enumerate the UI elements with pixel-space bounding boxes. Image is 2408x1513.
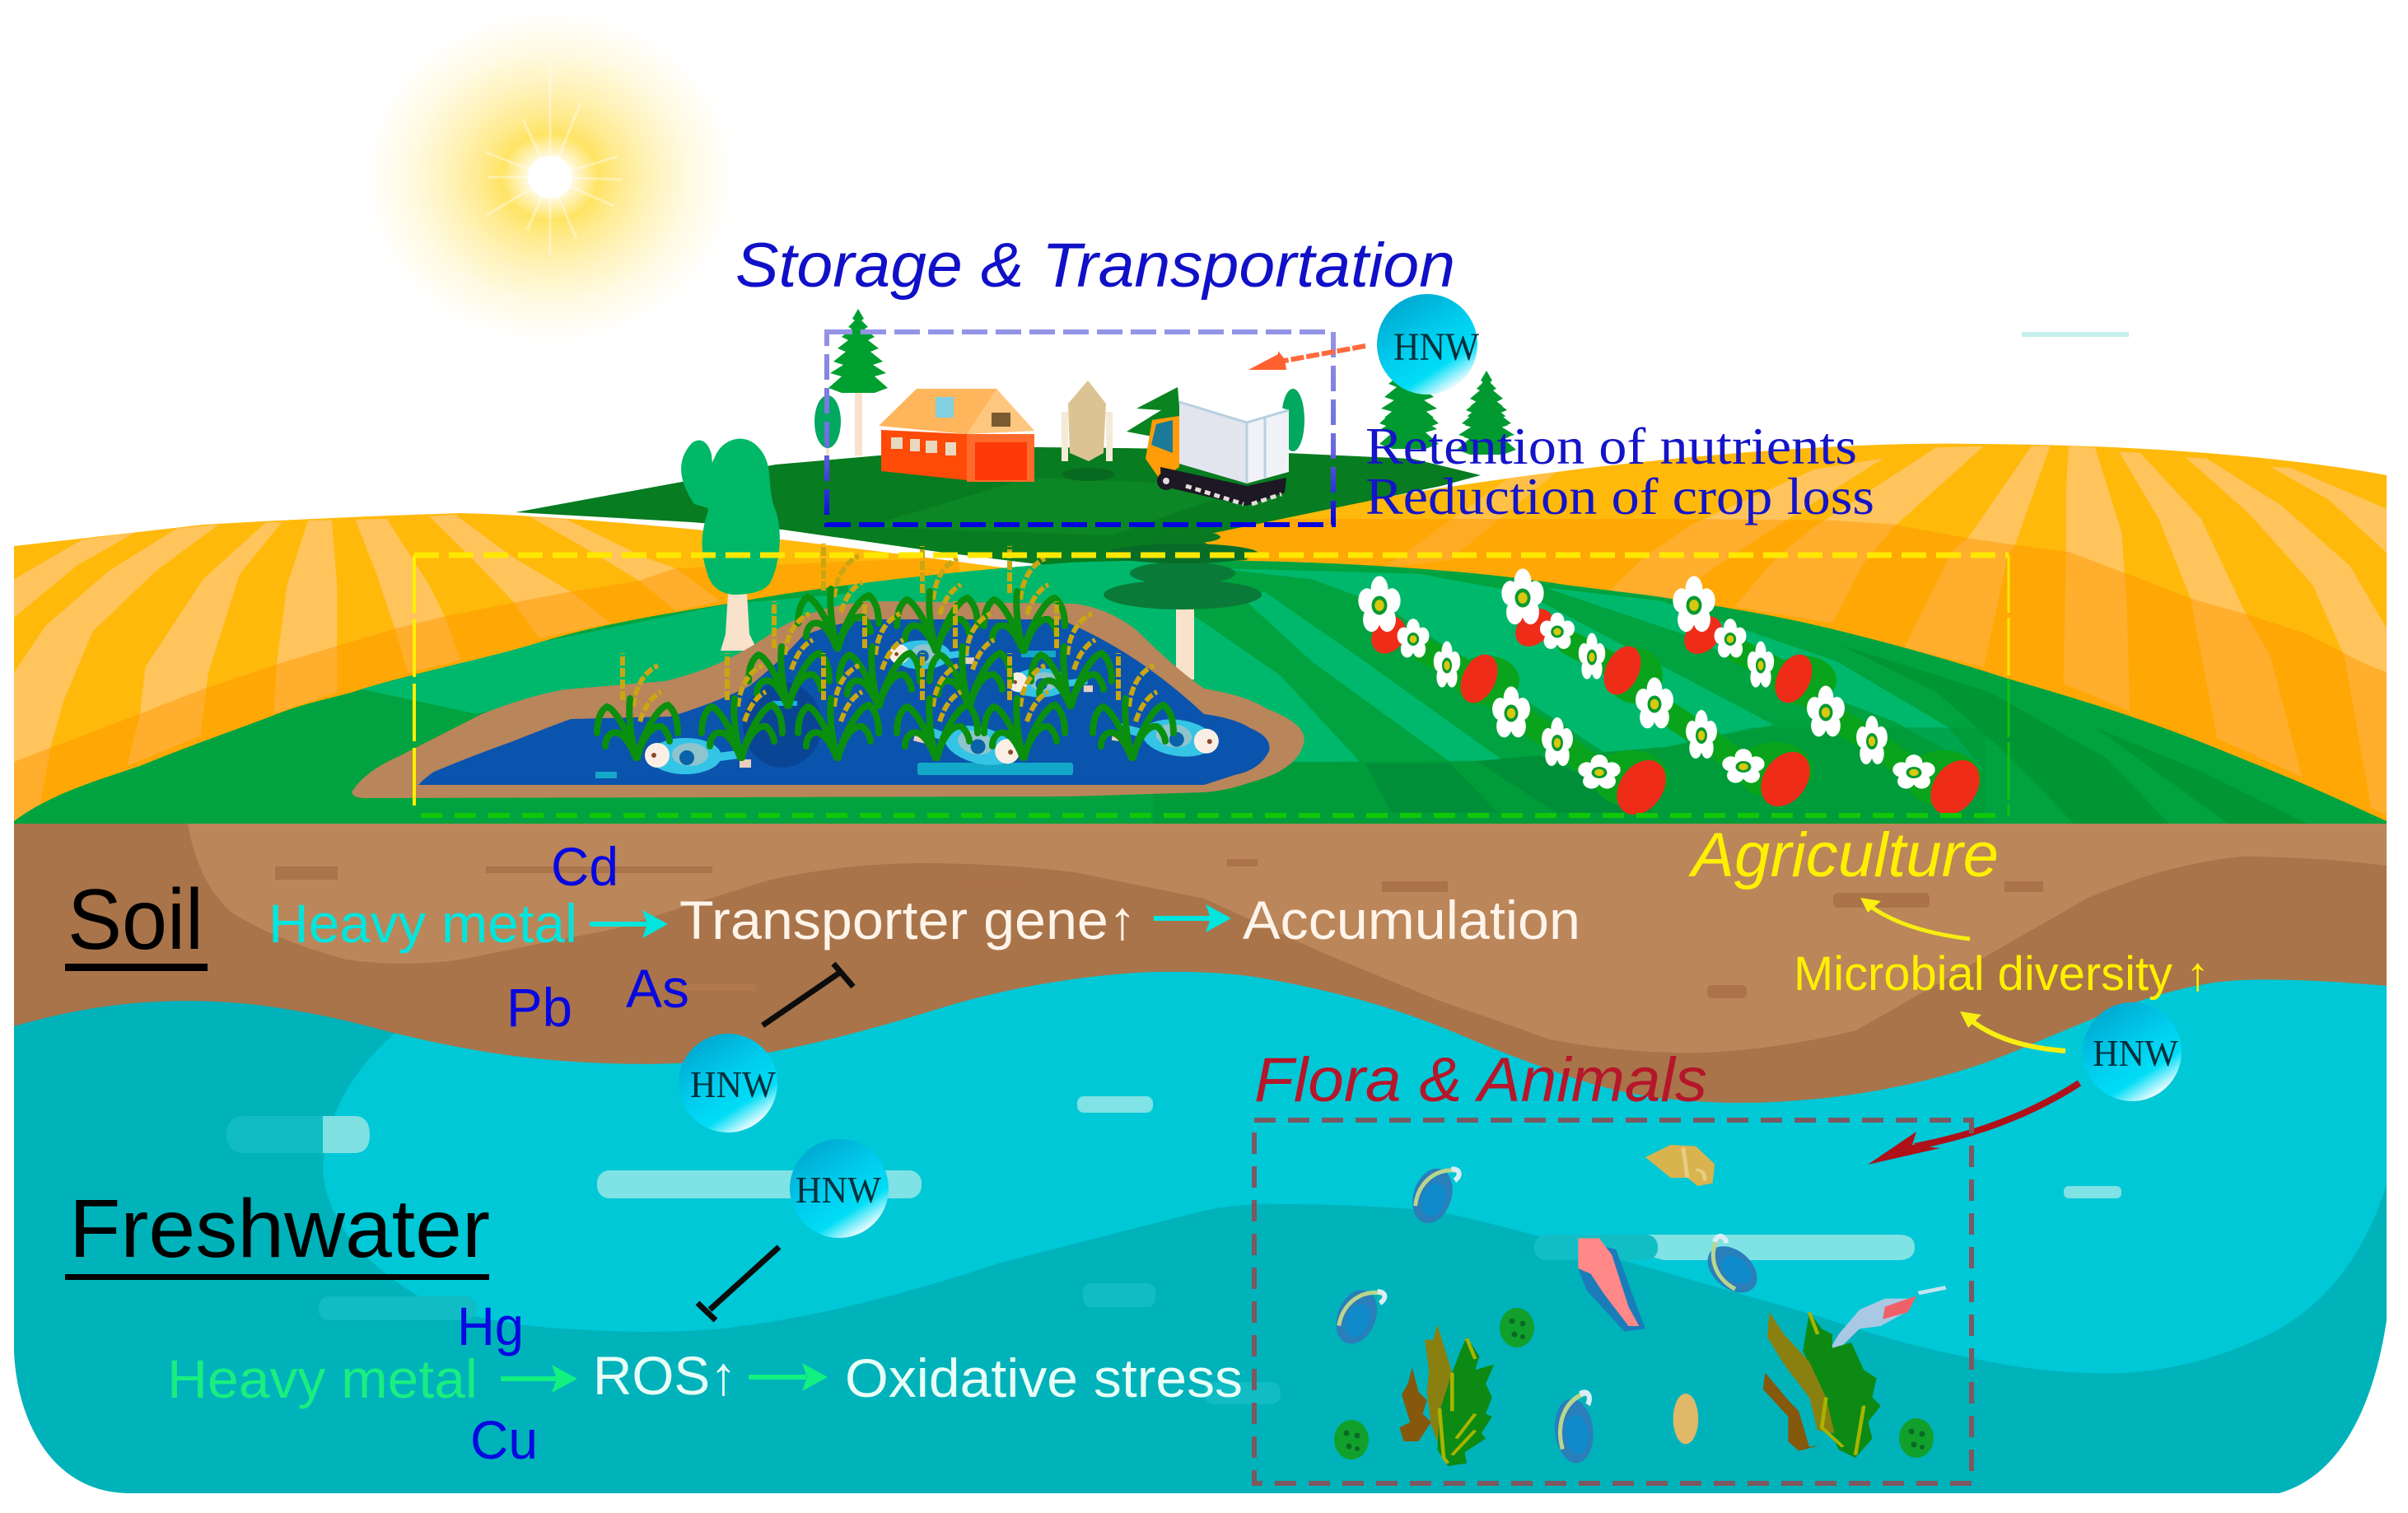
label: Freshwater: Freshwater [69, 1183, 490, 1275]
text: oxidative stress: Oxidative stress [845, 1347, 1243, 1408]
metals around soil pathway: As [626, 958, 689, 1019]
seaweed clump left [1399, 1324, 1494, 1466]
house [879, 389, 1034, 434]
HNW sphere: flora and animals: HNW [2093, 1032, 2179, 1074]
soil layer [14, 824, 2387, 1112]
back green hill [516, 447, 1481, 568]
paramecium cells [1406, 1160, 1460, 1228]
inhibition symbol: freshwater [698, 1247, 779, 1320]
storage farm scene [814, 309, 1304, 506]
water body [14, 964, 2387, 1493]
tree behind truck [1127, 387, 1184, 461]
foreground green hill with crop stripes [14, 552, 2394, 832]
shell [1645, 1145, 1715, 1186]
pond [352, 601, 1304, 798]
HNW sphere: soil: HNW [690, 1063, 777, 1105]
metals around freshwater pathway: Cu [470, 1409, 538, 1470]
metals around soil pathway [506, 836, 689, 1038]
text: heavy metal soil: Heavy metal [268, 893, 577, 954]
arrow [1154, 904, 1231, 932]
arrow: HNW to storage [1248, 346, 1365, 370]
label: agriculture: Agriculture [1688, 820, 1999, 890]
fish in pond [645, 640, 1221, 774]
water highlight bars [226, 1096, 2121, 1404]
green algae [1500, 1308, 1534, 1347]
metals around soil pathway: Cd [551, 836, 618, 897]
text: heavy metal water: Heavy metal [167, 1348, 478, 1409]
metals around freshwater pathway: Hg [457, 1296, 524, 1357]
arrow [501, 1365, 577, 1393]
silo [1068, 381, 1106, 461]
right golden field [1204, 443, 2387, 821]
faint distant mark [2022, 332, 2129, 337]
HNW sphere: flora and animals [2083, 1002, 2182, 1101]
text: ROS: ROS↑ [593, 1345, 737, 1406]
label: flora and animals: Flora & Animals [1254, 1045, 1707, 1115]
arrow [749, 1363, 828, 1391]
text: transporter gene: Transporter gene↑ [679, 890, 1136, 950]
inhibition symbol: soil [763, 964, 853, 1025]
metals around soil pathway: Pb [506, 977, 572, 1038]
rice plants [597, 544, 1174, 758]
text: retention of nutrients: Retention of nutrients [1365, 417, 1857, 475]
lighter soil band [188, 824, 2387, 1053]
HNW sphere: soil [679, 1034, 777, 1132]
bright water region [323, 964, 2387, 1373]
arrow: microbial to agriculture [1860, 898, 1970, 939]
freshwater pathway [167, 1345, 1243, 1409]
left golden field [14, 513, 1005, 821]
aquatic organisms [1328, 1145, 1946, 1466]
arrow [590, 910, 668, 938]
shrimp pink [1578, 1238, 1645, 1332]
dark tree right of pond [1104, 530, 1262, 679]
pine by the house [828, 309, 888, 393]
flora and animals dashed box [1254, 1120, 1972, 1483]
soil pathway [268, 890, 1580, 954]
small shell [1673, 1394, 1698, 1444]
tall tree left of pond [681, 439, 780, 651]
sun [364, 11, 736, 343]
text: reduction of crop loss: Reduction of crop loss [1365, 467, 1874, 525]
right pines [1379, 344, 1516, 455]
arrow: HNW to microbial [1960, 1011, 2065, 1051]
seaweed clump right [1763, 1312, 1881, 1458]
text: accumulation: Accumulation [1243, 890, 1580, 950]
label: Soil: Soil [68, 872, 203, 968]
text: microbial diversity: Microbial diversity ↑ [1794, 947, 2210, 1001]
strawberry rows [1358, 568, 1990, 824]
hill shading [865, 478, 1252, 535]
storage dashed box [827, 332, 1333, 525]
organisms drawn in source crop coordinates [1399, 1145, 1946, 1466]
HNW sphere: storage [1377, 294, 1480, 395]
metals around freshwater pathway [457, 1296, 538, 1470]
title: storage and transportation: Storage & Transportation [735, 231, 1455, 301]
agriculture dashed box [414, 555, 2009, 815]
HNW sphere: storage: HNW [1393, 325, 1480, 369]
arrow: HNW to flora and animals [1868, 1083, 2079, 1165]
truck [1146, 416, 1179, 480]
HNW sphere: freshwater: HNW [796, 1169, 882, 1211]
shrimp grey [1818, 1287, 1946, 1370]
HNW sphere: freshwater [790, 1139, 889, 1238]
